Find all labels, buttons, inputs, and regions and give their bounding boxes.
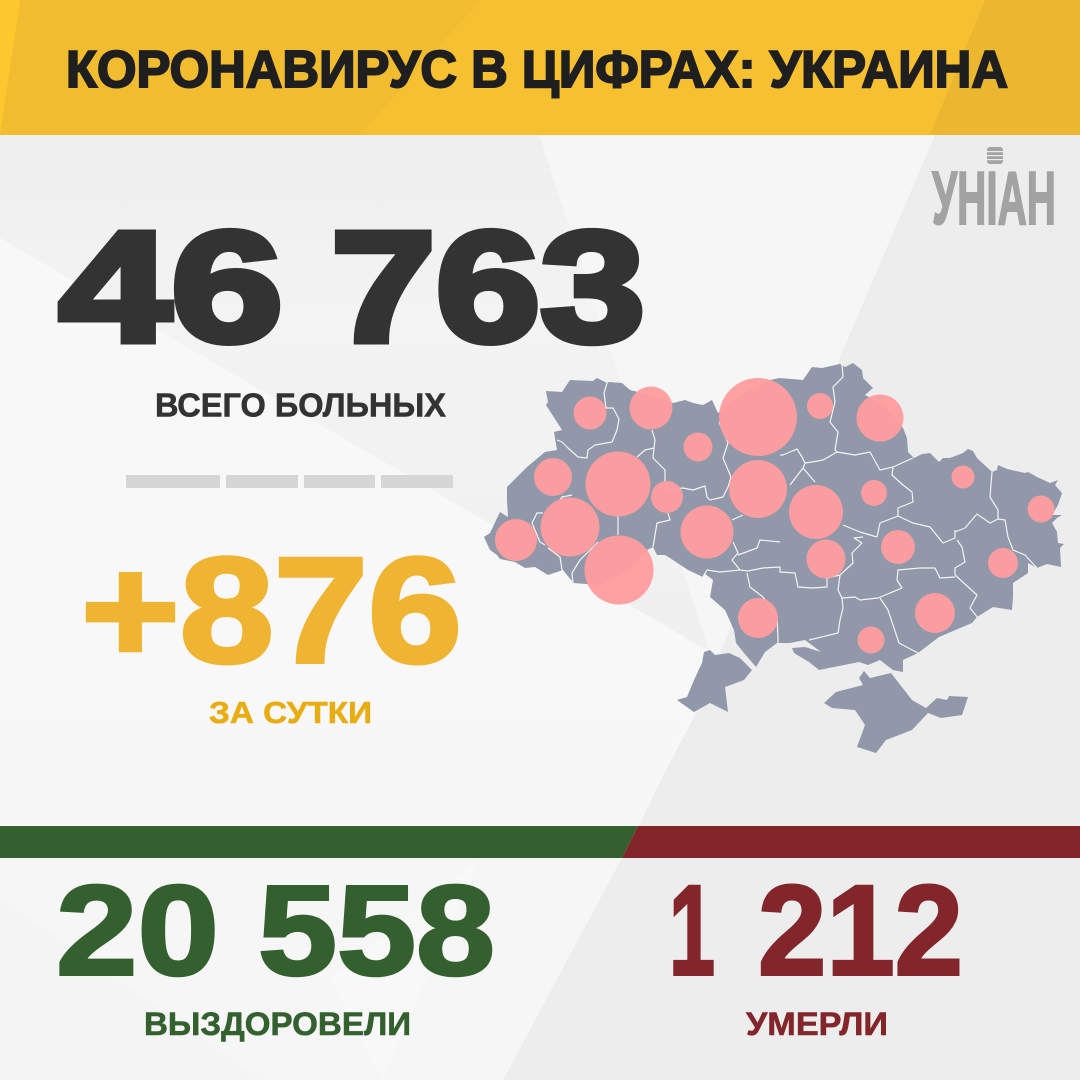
total cases label: ВСЕГО БОЛЬНЫХ — [155, 386, 446, 424]
map case circles — [495, 378, 1054, 654]
deaths bar — [622, 826, 1080, 858]
deaths number: 1 — [669, 860, 715, 1002]
recovered number: 558 — [258, 860, 495, 1002]
total cases number: 46 — [59, 200, 283, 375]
recovered bar — [0, 826, 638, 858]
deaths number — [669, 860, 963, 1002]
recovered label: ВЫЗДОРОВЕЛИ — [144, 1006, 411, 1042]
map regions — [484, 363, 1064, 753]
recovered number — [56, 860, 495, 1002]
total cases number: 763 — [331, 200, 645, 375]
title: КОРОНАВИРУС В ЦИФРАХ: УКРАИНА — [66, 41, 1008, 99]
daily increase number: +876 — [81, 526, 462, 694]
deaths label: УМЕРЛИ — [746, 1006, 888, 1042]
deaths number: 212 — [758, 860, 963, 1002]
recovered number: 20 — [56, 860, 219, 1002]
total cases number — [59, 200, 645, 375]
map of Ukraine — [484, 363, 1064, 753]
daily increase label: ЗА СУТКИ — [209, 695, 372, 730]
dashed separator — [126, 475, 453, 488]
